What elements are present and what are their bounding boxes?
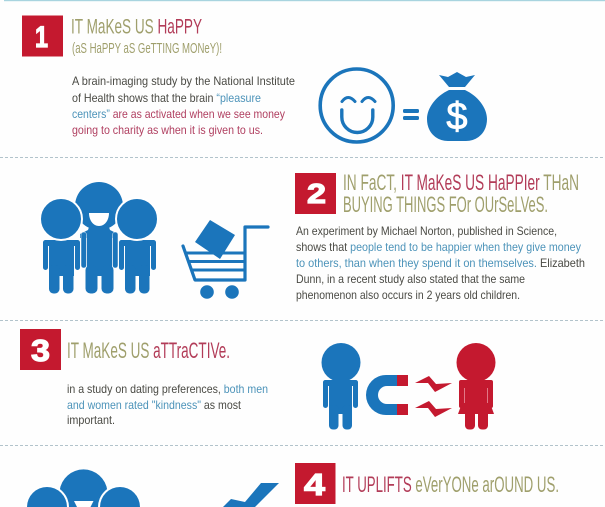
section 2 bbox=[40, 170, 585, 302]
body text 1: of Health shows that the brain “pleasure bbox=[72, 91, 261, 105]
icon: magnet bbox=[366, 375, 408, 415]
number badge 2: 2 bbox=[307, 178, 326, 209]
heading 2 bbox=[343, 170, 579, 217]
number badge 1 bbox=[22, 16, 63, 56]
body text 3: important. bbox=[67, 413, 115, 427]
icon: money bag bbox=[427, 72, 487, 141]
icon: money bag: $ bbox=[446, 96, 468, 138]
number badge 4: 4 bbox=[304, 467, 326, 502]
body text 1: going to charity as when it is given to us. bbox=[72, 123, 263, 137]
body text 3: and women rated "kindness" as most bbox=[67, 398, 242, 412]
top rule bbox=[4, 0, 605, 1]
icon: equals sign bbox=[403, 109, 419, 120]
icon: check mark bbox=[223, 483, 279, 507]
body text 2: Dunn, in a recent study also stated that the same bbox=[296, 272, 525, 286]
icon: lightning sparks bbox=[415, 376, 452, 417]
section 1 bbox=[22, 14, 487, 142]
heading 1 bbox=[71, 14, 222, 57]
body text 3: in a study on dating preferences, both men bbox=[67, 382, 268, 396]
icon: group of people, cropped bbox=[25, 469, 142, 507]
person: middle bbox=[75, 182, 123, 294]
body text 3 bbox=[67, 382, 268, 427]
body text 2 bbox=[296, 224, 585, 302]
number badge 1: 1 bbox=[35, 21, 48, 54]
icon: smiley face bbox=[320, 69, 393, 142]
heading 3: IT MaKeS US aTTraCTIVe. bbox=[67, 338, 230, 363]
icon: shopping cart bbox=[183, 220, 268, 299]
body text 2: to others, than when they spend it on themselves. Elizabeth bbox=[296, 256, 585, 270]
body text 2: phenomenon also occurs in 2 years old children. bbox=[296, 288, 520, 302]
heading 1: (aS HaPPY aS GeTTING MONeY)! bbox=[72, 41, 222, 57]
icon: blue man bbox=[322, 343, 360, 430]
body text 1: centers” are as activated when we see money bbox=[72, 107, 285, 121]
number badge 3: 3 bbox=[31, 333, 50, 368]
number badge 2 bbox=[295, 173, 336, 214]
section 3 bbox=[20, 329, 496, 430]
body text 1: A brain-imaging study by the National Institute bbox=[72, 74, 295, 88]
icon: red woman bbox=[456, 343, 496, 430]
body text 2: shows that people tend to be happier when they give money bbox=[296, 240, 581, 254]
section 4 bbox=[25, 463, 559, 507]
number badge 3 bbox=[20, 329, 61, 370]
heading 1: IT MaKeS US HaPPY bbox=[71, 14, 202, 38]
number badge 4 bbox=[295, 463, 336, 504]
body text 1 bbox=[72, 74, 295, 137]
body text 2: An experiment by Michael Norton, published in Science, bbox=[296, 224, 557, 238]
person: right bbox=[119, 240, 156, 294]
person: left bbox=[43, 240, 80, 294]
icon: group of people bbox=[40, 182, 158, 294]
